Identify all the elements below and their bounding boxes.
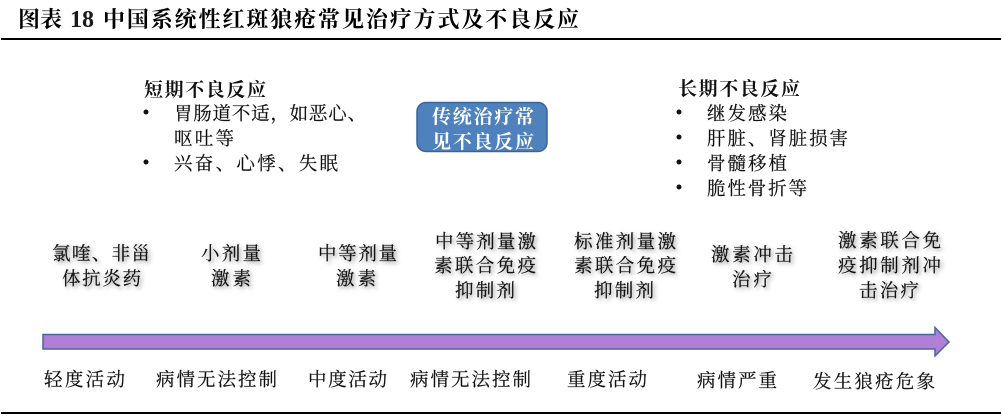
title: 18 [70,7,94,33]
treatment: steroids with immunosuppressant pulse therapy [838,231,941,302]
treatment: antimalarials and NSAIDs [52,244,150,290]
treatment: standard dose steroids with immunosuppressants [574,232,676,302]
callout: common adverse reactions of traditional treatment [417,102,547,153]
stage: lupus crisis: 发生狼疮危象 [813,372,935,393]
treatment: medium dose steroids: 激素 [336,269,376,290]
bullet list: short-term [144,104,366,175]
callout: common adverse reactions of traditional treatment: 见不良反应 [432,131,534,153]
stage: severe condition: 病情严重 [697,371,777,392]
treatment: medium dose steroids with immunosuppressants: 素联合免疫 [434,256,536,277]
title: 中国系统性红斑狼疮常见治疗方式及不良反应 [103,7,579,32]
bottom rule [1,412,1001,414]
panel: short-term adverse reactions [144,79,366,175]
stage: uncontrolled: 病情无法控制 [410,370,531,391]
arrow: disease progression [43,328,949,356]
bullet list: long-term: 骨髓移植 [707,154,787,175]
bullet list: long-term: 继发感染 [707,104,787,125]
treatment: medium dose steroids with immunosuppressants [434,232,536,302]
panel: long-term adverse reactions [676,78,848,200]
treatment: standard dose steroids with immunosuppressants: 抑制剂 [594,281,654,302]
bullet list: short-term: 兴奋、心悸、失眠 [174,154,338,175]
treatment: medium dose steroids: 中等剂量 [318,244,397,265]
treatment: steroid pulse therapy: 治疗 [732,270,772,291]
bullet list: short-term: 呕吐等 [174,129,234,150]
stage: moderate activity: 中度活动 [308,370,387,391]
treatment: steroid pulse therapy: 激素冲击 [711,245,793,266]
stage: severe activity: 重度活动 [567,370,647,391]
treatment: steroids with immunosuppressant pulse therapy: 疫抑制剂冲 [838,256,941,277]
stage: uncontrolled: 病情无法控制 [156,370,277,391]
stage: mild activity: 轻度活动 [44,370,125,391]
treatment: steroid pulse therapy [711,245,793,291]
heading: long-term: 长期不良反应 [678,78,800,100]
treatment: medium dose steroids with immunosuppressants: 抑制剂 [455,281,515,302]
treatment: standard dose steroids with immunosuppressants: 标准剂量激 [574,232,676,253]
treatment: medium dose steroids with immunosuppressants: 中等剂量激 [435,232,536,253]
treatment: low dose steroids: 激素 [211,269,251,290]
treatment: standard dose steroids with immunosuppressants: 素联合免疫 [574,256,676,277]
callout: common adverse reactions of traditional treatment: 传统治疗常 [432,106,534,128]
bullet list: long-term: 肝脏、肾脏损害 [707,128,848,150]
heading: short-term: 短期不良反应 [144,79,266,101]
top rule [1,38,1001,40]
treatment: antimalarials and NSAIDs: 体抗炎药 [62,269,141,290]
bullet list: long-term [676,104,848,200]
treatment: steroids with immunosuppressant pulse therapy: 击治疗 [859,281,919,302]
treatment: antimalarials and NSAIDs: 氯喹、非甾 [52,244,150,265]
bullet list: short-term: 胃肠道不适，如恶心、 [174,104,366,125]
bullet list: long-term: 脆性骨折等 [707,179,807,200]
treatment: medium dose steroids [318,244,397,290]
title: 图表 [18,7,62,32]
treatment: steroids with immunosuppressant pulse therapy: 激素联合免 [838,231,941,252]
treatment: low dose steroids [201,244,261,290]
treatment: low dose steroids: 小剂量 [201,244,261,265]
